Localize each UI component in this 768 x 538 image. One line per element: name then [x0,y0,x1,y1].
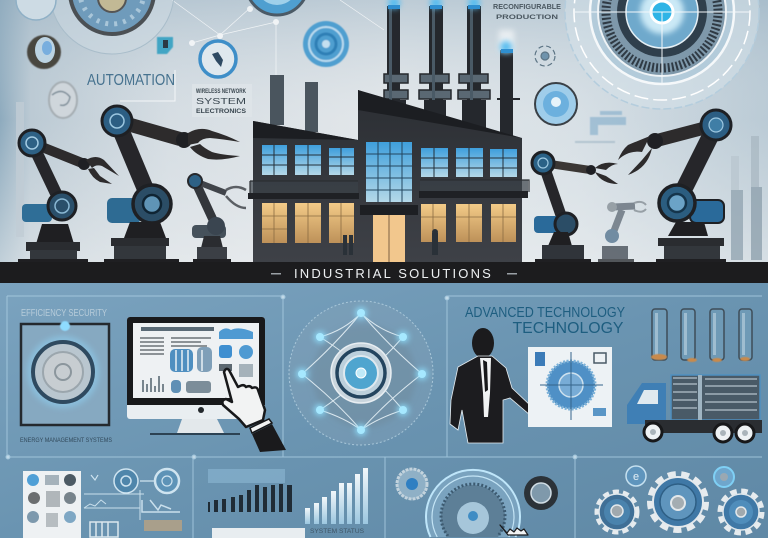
factory building [248,90,529,262]
table header block [208,469,285,483]
network lines [172,0,384,85]
text block: system label: ELECTRONICS [196,108,247,115]
upper windows left [262,145,354,175]
upper windows right [421,148,517,177]
small glowing badge [714,467,734,487]
title text: INDUSTRIAL SOLUTIONS [294,266,492,281]
text block: top center-right label: RECONFIGURABLE [493,4,561,11]
glowing dial [27,321,99,408]
background tower left [16,102,24,237]
factory chimneys [270,6,520,140]
icon: top left gauge [16,0,174,54]
icon: small teal badge [157,37,173,54]
dark badge [524,476,558,510]
panel: gears [597,466,762,533]
small e badge: e [633,471,639,483]
caption: ENERGY MANAGEMENT SYSTEMS [20,437,113,444]
panel: central atom hub [289,301,433,445]
figures [343,229,438,255]
robot arm 6 right large [618,110,731,262]
framed screen [21,324,109,425]
icon: small outline gear [535,46,555,66]
panel: advanced technology [450,304,762,443]
icon: pointing hand [222,369,286,452]
balcony [248,180,529,199]
background towers right [731,136,762,260]
robot arm 4 right [532,152,618,262]
frame around automation [120,70,175,101]
pale ring icon [397,469,427,499]
title dash right [507,273,517,274]
text block: top center-right label: PRODUCTION [496,15,558,21]
dashboard content [140,327,253,393]
icon: truck [627,375,762,442]
panel dividers [6,295,762,538]
dark bar chart [208,484,292,512]
text block: top center-right label [493,4,561,21]
robot arm 1 [18,130,119,262]
orbits [302,313,422,430]
chart caption: SYSTEM STATUS [310,528,365,535]
title dash left [271,273,281,274]
hub node glow [296,307,428,436]
data card [528,347,612,427]
robot arm 3 small [188,174,246,262]
background: lower section [0,283,768,538]
lower windows [262,203,516,243]
mini line charts [84,490,180,537]
panel: touch dial [397,469,558,537]
heading: efficiency: EFFICIENCY SECURITY [21,307,107,319]
panel: monitor dashboard [127,317,286,452]
monitor stand [177,419,224,433]
icon: pointer hand [500,525,528,535]
entrance door [360,205,418,262]
factory walls and roof [253,90,522,262]
panel: bar charts [208,468,368,538]
gear large center [650,474,706,530]
text block: system label [192,84,252,117]
large glowing dial [426,470,520,537]
hub nodes [298,309,426,434]
table strip [212,528,305,538]
text block: system label: WIRELESS NETWORK [196,88,246,95]
title band [0,262,768,283]
gear right [720,491,762,533]
swatch sheet [23,471,81,538]
background: upper scene [0,0,768,265]
icon: blue eye badge [535,83,577,125]
cylinders [651,309,752,362]
ring icons [91,469,179,493]
gear small left [597,492,637,532]
icon: pale ring left [49,82,77,118]
small e badge [626,466,646,486]
figure: businessman [450,328,546,443]
text: automation: AUTOMATION [87,72,175,89]
hub core [331,343,391,403]
icon: dark ring left [27,35,61,69]
icon: top center disc [246,0,308,15]
small gold tile [144,520,182,531]
icon: blue ring with tool [200,41,236,77]
panel: efficiency display [20,307,113,444]
icon: faded machine sketch [575,111,626,142]
heading: technology: TECHNOLOGY [512,320,624,337]
icon: large radial hub top right [565,0,759,109]
monitor [127,317,265,419]
white bar chart [305,468,368,524]
text block: system label: SYSTEM [196,97,246,106]
roof highlight [253,90,522,140]
robot arm 2 [102,106,240,262]
icon: blue spiral disc [303,21,349,67]
panel: bottom left icons [23,469,182,538]
heading: advanced technology: ADVANCED TECHNOLOGY [465,304,625,321]
chimney glow [388,0,514,53]
central tall window [366,142,412,202]
robot arm 5 small grey [598,202,646,262]
